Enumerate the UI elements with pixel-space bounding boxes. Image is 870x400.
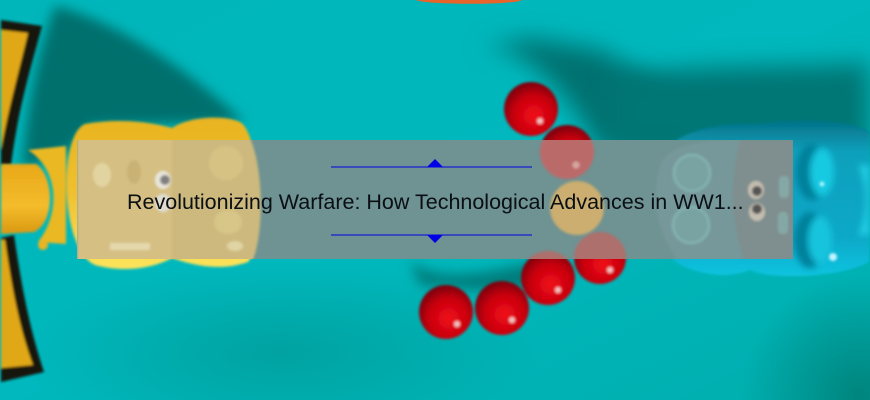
yellow toy through panel [77,138,261,262]
shadow of blue toy [610,62,869,150]
top divider with diamond [331,159,532,168]
balls through panel [521,125,626,305]
yellow handle [1,20,44,382]
shadow under balls [410,262,535,290]
objects seen through the panel [77,140,793,259]
blue toy [655,121,869,276]
shadow of red balls [478,38,690,150]
bottom divider with diamond [331,234,532,243]
blue toy through panel [656,140,795,262]
yellow toy [1,118,258,269]
translucent title panel [77,140,793,259]
orange object at top edge [416,0,522,4]
red balls [419,82,837,339]
title text: Revolutionizing Warfare: How Technological Advances in WW1... [127,190,744,214]
blue toy lobes [794,144,869,268]
shadow of yellow toy [22,6,244,170]
